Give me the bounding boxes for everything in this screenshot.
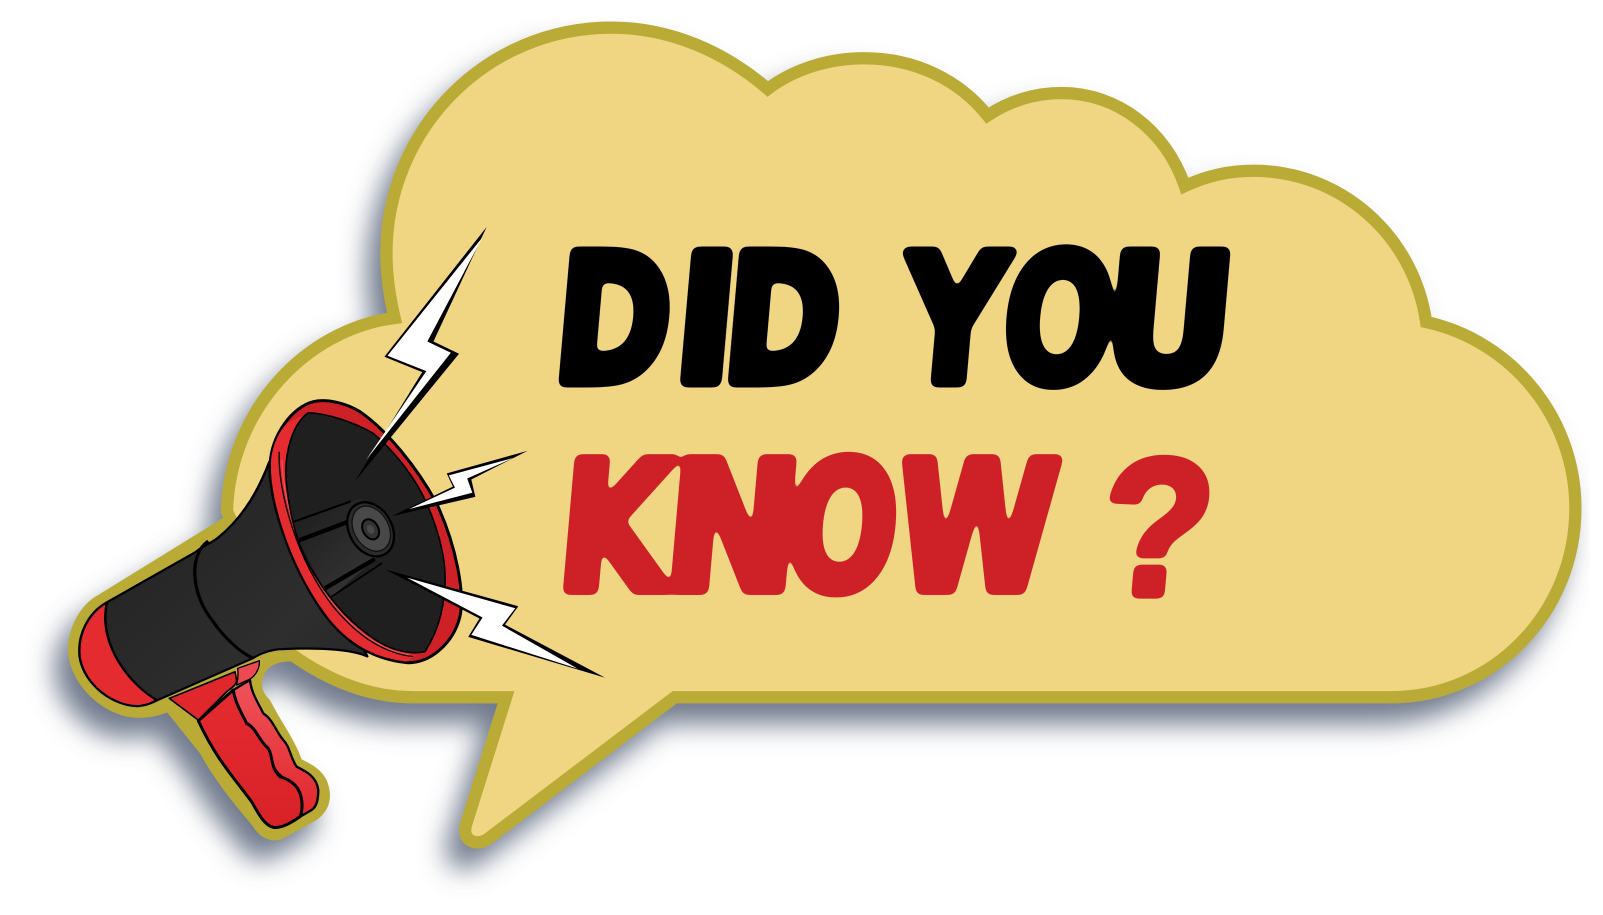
megaphone mouth	[270, 401, 461, 663]
heading: know: ?	[1093, 419, 1223, 636]
mouth interior	[286, 413, 445, 653]
heading: did you: D	[546, 217, 681, 425]
icon: megaphone	[79, 401, 461, 827]
speaker struts	[293, 498, 393, 597]
heading: know: K	[551, 425, 684, 632]
icon: lightning bolt middle	[392, 451, 528, 516]
heading: did you: U	[1095, 217, 1243, 425]
speaker hub	[338, 494, 403, 565]
heading: did you: O	[995, 217, 1124, 425]
icon: lightning bolt bottom	[385, 569, 605, 678]
megaphone handle	[169, 661, 318, 827]
icon: lightning bolt top	[355, 227, 487, 482]
heading: did you	[546, 217, 1243, 425]
megaphone rear cap and body	[79, 462, 367, 706]
heading: know: W	[887, 425, 1066, 632]
heading: know: N	[657, 425, 810, 632]
heading: did you: D	[716, 217, 850, 425]
heading: know	[550, 419, 1223, 636]
heading: did you: I	[666, 217, 746, 425]
heading: know: O	[777, 425, 907, 632]
heading: did you: Y	[891, 217, 1016, 425]
